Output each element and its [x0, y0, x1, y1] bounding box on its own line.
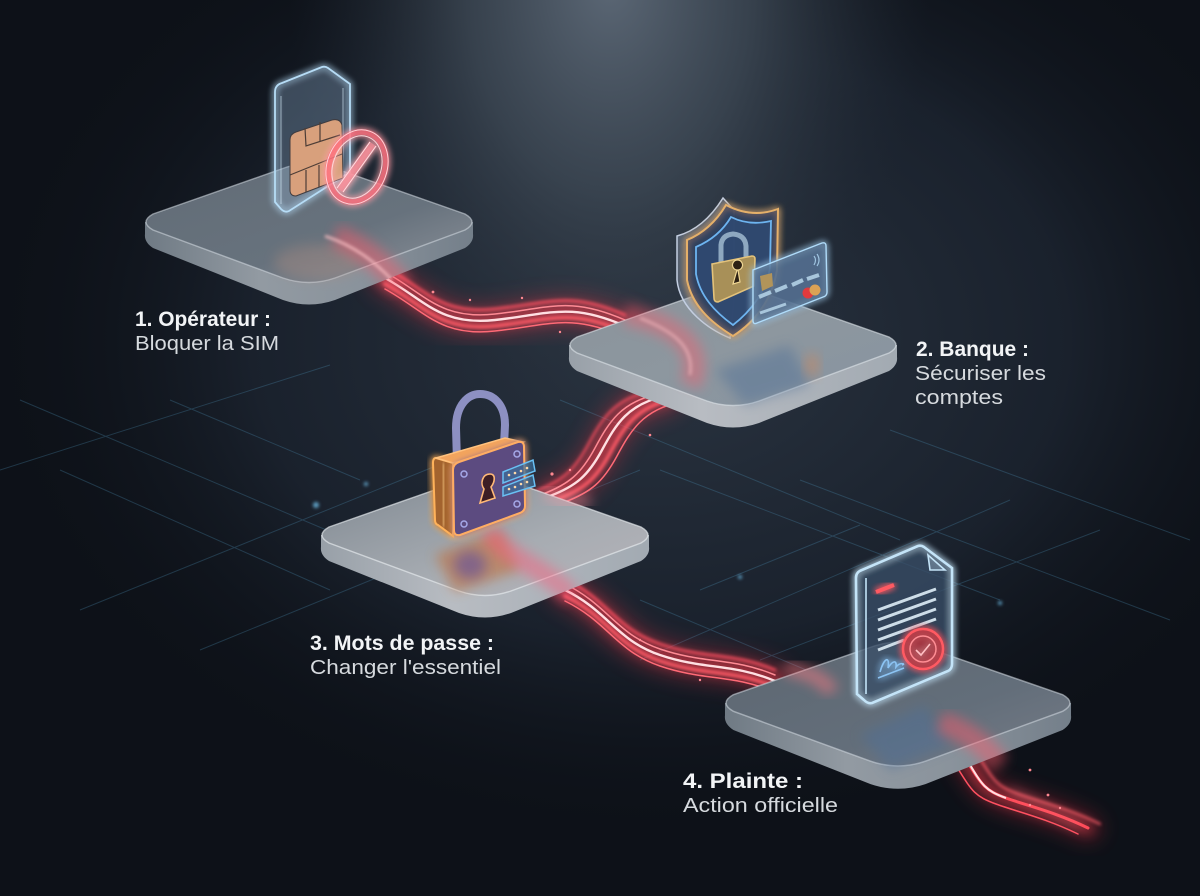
- label: step 1: Bloquer la SIM: [135, 333, 279, 355]
- icon: SIM card with prohibition sign: [275, 67, 398, 213]
- label: step 2: comptes: [915, 387, 1003, 409]
- signature: [878, 660, 904, 678]
- label: step 3: 3. Mots de passe :: [310, 632, 494, 655]
- panel: platform 2: [569, 286, 897, 428]
- icon: padlock with password fields: [433, 394, 535, 536]
- label: step 2: [915, 338, 1046, 409]
- text lines: [878, 589, 936, 650]
- shackle: [456, 394, 505, 462]
- shield padlock: [712, 234, 755, 302]
- bank card: [753, 243, 827, 324]
- label: step 2: Sécuriser les: [915, 363, 1046, 385]
- shield: [677, 198, 778, 338]
- label: step 1: [135, 308, 279, 355]
- flow ribbon: exit from step 4: [955, 754, 1100, 834]
- panel: platform 3: [321, 476, 649, 618]
- particles: [432, 291, 1061, 809]
- label: step 4: 4. Plainte :: [683, 770, 803, 793]
- reflection on platform 3: [435, 490, 590, 596]
- reflection on platform 1: [274, 236, 402, 286]
- panel: platform 4: [725, 642, 1071, 789]
- grid sparkles: [313, 482, 1002, 605]
- icon: shield with padlock and bank card: [677, 198, 827, 338]
- red title line: [876, 585, 894, 592]
- label: step 2: 2. Banque :: [916, 338, 1029, 361]
- icon: official document with stamp: [856, 546, 952, 703]
- reflection on platform 2: [625, 314, 819, 405]
- label: step 4: Action officielle: [683, 795, 838, 817]
- flow ribbon: step 2 to 3: [536, 391, 680, 502]
- label: step 3: [310, 632, 501, 679]
- panel: platform 1: [145, 164, 473, 304]
- stamp: [903, 629, 943, 669]
- label: step 4: [683, 770, 838, 817]
- label: step 3: Changer l'essentiel: [310, 657, 501, 679]
- keyhole: [480, 474, 495, 503]
- SIM chip: [290, 120, 343, 196]
- prohibition sign: [316, 121, 398, 213]
- padlock side: [433, 458, 453, 536]
- flow ribbon: step 1 to 2: [385, 267, 625, 337]
- padlock body: [453, 442, 525, 535]
- perspective grid: [0, 365, 1190, 680]
- password fields: [503, 460, 535, 496]
- reflection on platform 4: [785, 668, 1000, 770]
- flow ribbon: step 3 to 4: [565, 579, 775, 692]
- label: step 1: 1. Opérateur :: [135, 308, 271, 331]
